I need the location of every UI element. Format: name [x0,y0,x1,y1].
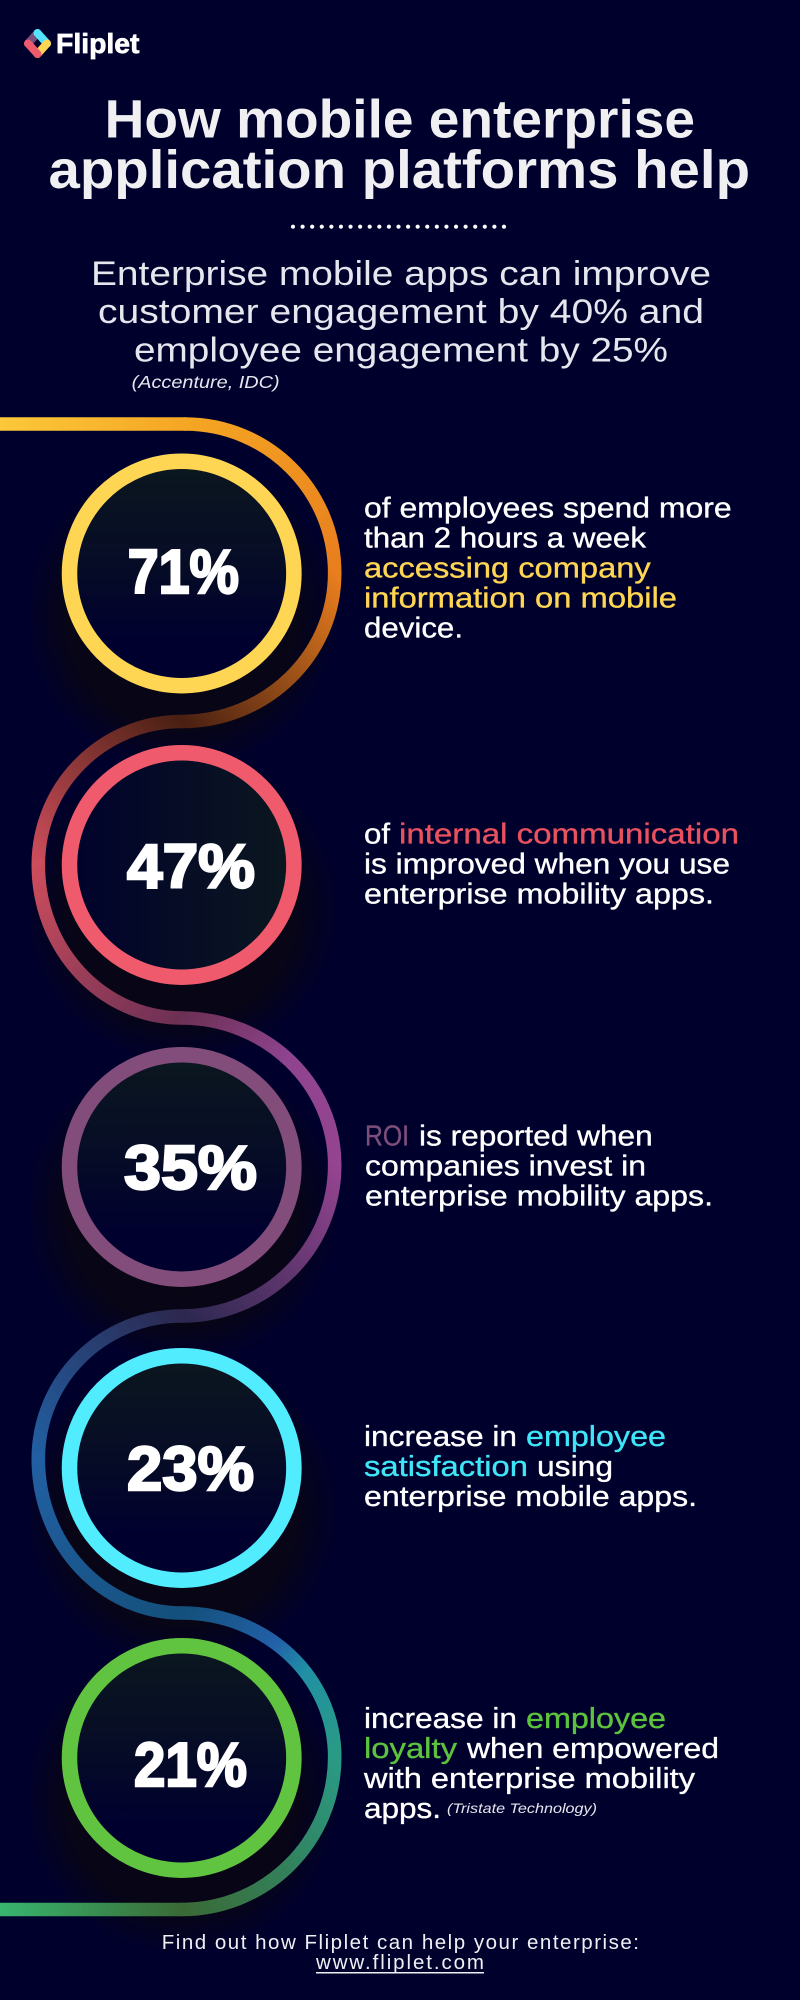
icon: Fliplet diamond [28,33,47,54]
text: 35% description: companies invest in [365,1151,646,1183]
ring: yellow [70,461,294,686]
footer call to action [162,1931,639,1974]
logo: Fliplet: Fliplet [56,28,140,59]
footer call to action: www.fliplet.com [315,1951,484,1974]
text: 21% description: when empowered [466,1733,719,1765]
text: 21% description: loyalty [364,1733,458,1765]
ring: cyan [70,1356,294,1580]
text: 21% description: increase in [364,1703,517,1735]
text: 71% description: accessing company [364,552,651,584]
text: 47% description: of [364,818,391,850]
stat 23% [70,1356,294,1580]
text: 47% description: enterprise mobility apps. [364,878,714,910]
ring: purple [70,1055,294,1279]
text: 71% description: of employees spend more [364,493,732,525]
subtitle: Enterprise mobile apps can improve [91,255,711,293]
text: 23% description: increase in [364,1421,517,1453]
circle shadows [24,457,340,1956]
text: 23% description: using [537,1451,613,1483]
text: 21% description: employee [526,1703,666,1735]
text: 71% description: device. [364,612,463,644]
source: Accenture, IDC: (Accenture, IDC) [132,372,280,392]
text: 71% description [364,493,732,644]
text: 71% description: than 2 hours a week [364,523,647,555]
subtitle [91,255,711,370]
text: 23% description: satisfaction [364,1451,528,1483]
connecting ribbon [0,424,335,1910]
text: 21% description: with enterprise mobility [363,1763,696,1795]
stat 35% [70,1055,294,1279]
stat 47% [70,753,294,977]
title [48,89,750,200]
text: 47% description: is improved when you use [364,848,730,880]
text: 35% description [365,1121,713,1213]
title: How mobile enterprise [105,89,695,149]
footer call to action: Find out how Fliplet can help your enterprise: [162,1931,639,1954]
text: 47% description: internal communication [399,818,739,850]
text: 47% description [364,818,739,910]
subtitle: employee engagement by 25% [134,332,668,370]
text: 21% description: apps. [364,1793,441,1825]
stat 21% [70,1646,294,1870]
number: 71%: 71% [128,538,239,607]
title: application platforms help [48,140,750,200]
text: 35% description: ROI [365,1121,409,1153]
text: 71% description: information on mobile [364,582,677,614]
text: 35% description: is reported when [419,1121,653,1153]
number: 21%: 21% [134,1731,247,1800]
text: 23% description: employee [526,1421,666,1453]
number: 35%: 35% [124,1134,257,1203]
ring: red [70,753,294,977]
text: 21% description [363,1703,719,1825]
ring: green [70,1646,294,1870]
text: 35% description: enterprise mobility apps. [365,1181,713,1213]
stat 71% [70,461,294,686]
number: 23%: 23% [127,1435,254,1504]
number: 47%: 47% [127,832,255,902]
subtitle: customer engagement by 40% and [98,293,704,331]
source: Tristate Technology: (Tristate Technology) [447,1800,597,1816]
dotted divider [293,225,504,229]
text: 23% description: enterprise mobile apps. [364,1481,697,1513]
text: 23% description [364,1421,697,1513]
